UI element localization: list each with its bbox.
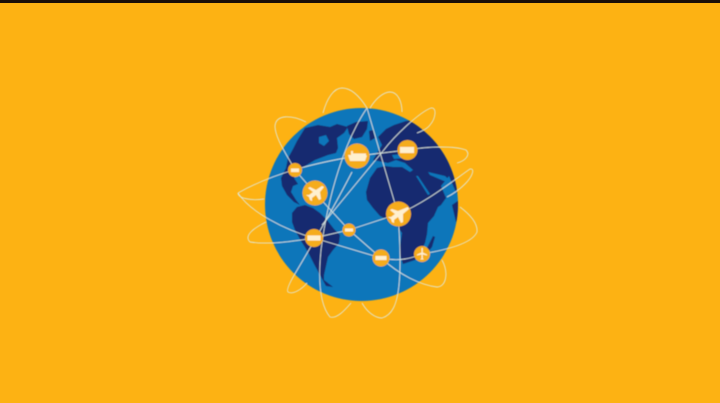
globe illustration xyxy=(238,88,477,318)
orbit loop: top left xyxy=(323,88,398,214)
node: small truck xyxy=(288,163,302,177)
continents xyxy=(281,120,462,287)
orbit loop: left long xyxy=(238,193,477,260)
node: van xyxy=(398,140,418,160)
Hudson Bay xyxy=(319,135,329,146)
orbit loop: lower left xyxy=(287,172,352,293)
orbit loop: top right xyxy=(370,92,402,112)
Red Sea xyxy=(416,176,430,195)
orbit and route lines xyxy=(238,88,477,318)
transport nodes xyxy=(288,140,430,266)
continent: South America xyxy=(292,205,340,287)
continent: Greenland xyxy=(347,121,368,139)
node: truck South America xyxy=(305,229,323,247)
island: Great Britain xyxy=(369,130,375,141)
orbit loop: bottom left xyxy=(320,108,367,317)
orbit loop: bottom right xyxy=(362,214,400,318)
globe ocean xyxy=(265,108,458,301)
node: small truck Atlantic xyxy=(342,224,356,236)
continent: Madagascar xyxy=(426,236,435,252)
orbit loop: upper right, long diagonal xyxy=(322,108,435,225)
Persian Gulf xyxy=(428,172,448,182)
infographic canvas xyxy=(0,0,720,320)
orbit loop: right upper xyxy=(238,147,468,193)
node: plane west xyxy=(302,180,328,206)
orbit loop: right xyxy=(250,169,473,243)
node: plane Africa xyxy=(386,202,411,226)
continent: North America xyxy=(281,124,348,205)
orbit loop: left xyxy=(238,193,264,200)
continent: Eurasia and Africa xyxy=(366,120,462,264)
node: truck south Atlantic xyxy=(372,250,390,266)
Black Sea xyxy=(392,154,405,159)
node: plane south Africa xyxy=(414,246,430,262)
orbit loop: left lower xyxy=(248,222,266,242)
orbit loop: upper left xyxy=(275,117,306,170)
node: ship xyxy=(344,144,370,168)
top black bar xyxy=(0,0,720,3)
island: Australia edge xyxy=(452,200,459,222)
orbit loop: lower right xyxy=(295,170,446,287)
